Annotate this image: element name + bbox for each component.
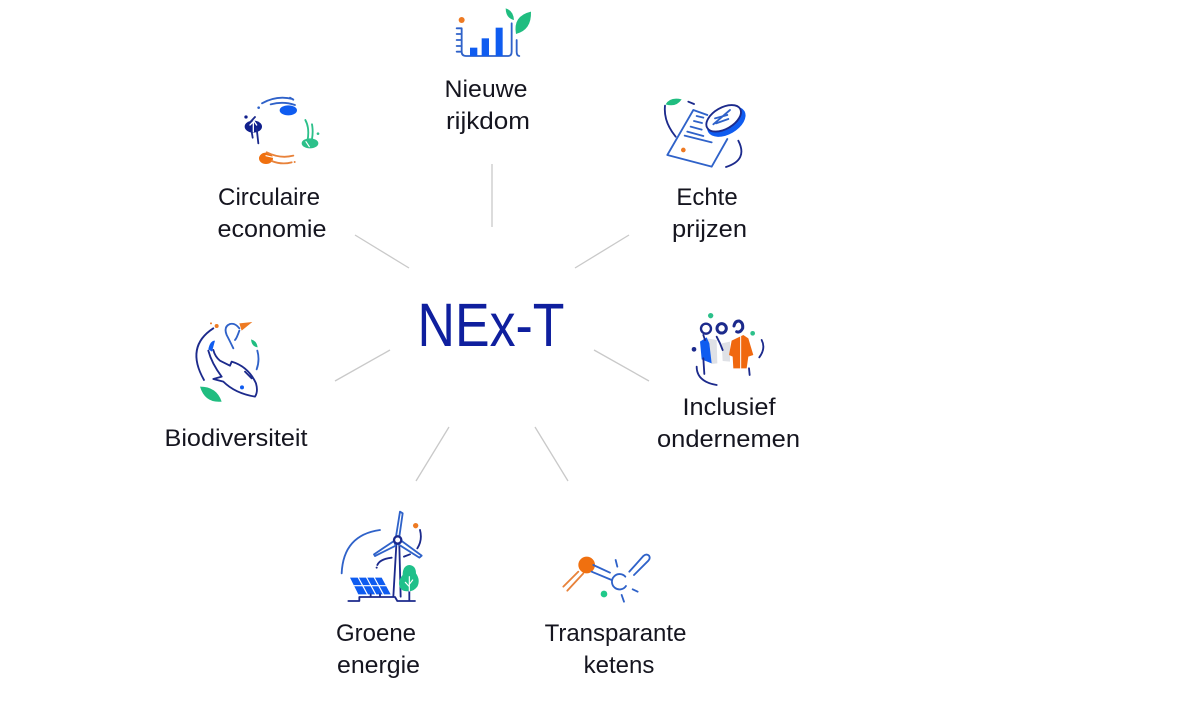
icon: wind turbine, solar panel and tree	[342, 512, 422, 601]
icon: chain links	[563, 555, 650, 602]
title: NEx-T: NEx-T	[418, 291, 564, 359]
label: ondernemen	[657, 426, 800, 453]
theme: Echte prijzen	[665, 99, 751, 243]
label: Circulaire	[218, 184, 320, 211]
theme: Inclusief ondernemen	[657, 313, 800, 453]
label: Groene	[336, 620, 416, 647]
icon: three people	[692, 313, 763, 385]
theme: Biodiversiteit	[164, 322, 308, 452]
label: prijzen	[672, 216, 747, 243]
label: Nieuwe	[444, 76, 528, 103]
icon: heron and fish	[196, 322, 259, 402]
label: Echte	[676, 184, 738, 211]
label: Inclusief	[682, 394, 776, 421]
label: economie	[218, 216, 326, 243]
icon: document with coin	[665, 99, 751, 167]
label: energie	[337, 652, 420, 679]
icon: bar chart with plant	[457, 8, 531, 56]
theme: Transparante ketens	[545, 555, 686, 679]
label: ketens	[584, 652, 654, 679]
label: rijkdom	[446, 108, 530, 135]
theme: Circulaire economie	[218, 98, 326, 243]
label: Transparante	[545, 620, 686, 647]
theme: Groene energie	[336, 512, 422, 679]
theme: Nieuwe rijkdom	[444, 8, 531, 135]
label: Biodiversiteit	[164, 425, 308, 452]
icon: circular arrows	[244, 98, 319, 164]
